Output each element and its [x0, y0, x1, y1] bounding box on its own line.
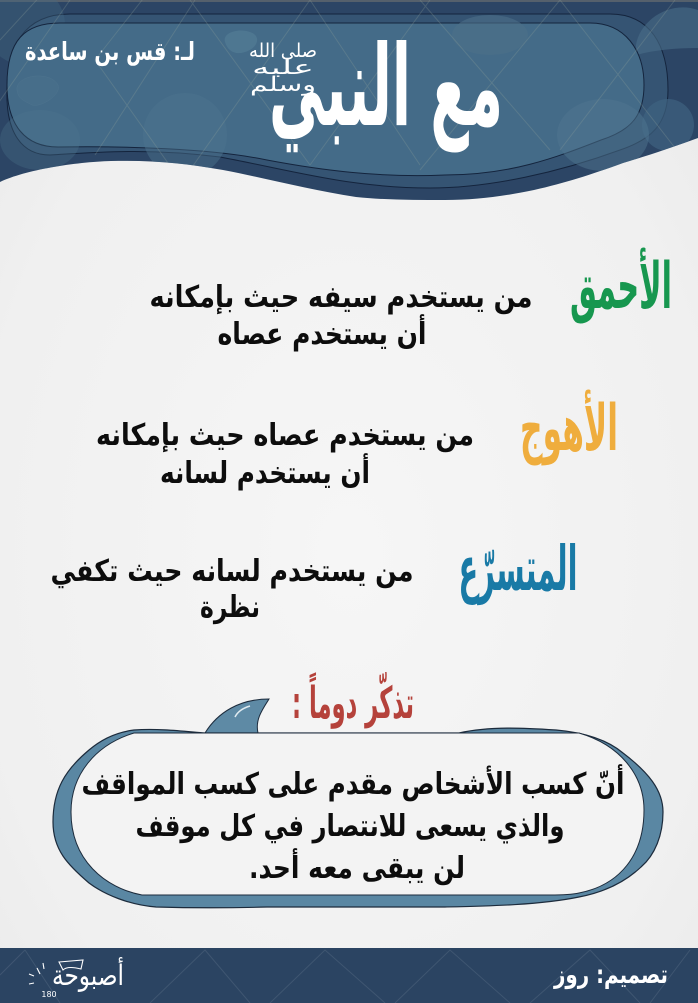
designer credit: تصميم: روز — [552, 960, 668, 990]
definition text: من يستخدم لسانه حيث تكفي — [50, 554, 414, 589]
callout text: والذي يسعى للانتصار في كل موقف — [136, 809, 564, 844]
definition text — [50, 554, 414, 625]
logo: 180 — [41, 990, 57, 999]
callout border — [53, 728, 663, 908]
callout fin — [205, 699, 269, 733]
definition text — [96, 418, 474, 491]
callout text: لن يبقى معه أحد. — [249, 848, 465, 886]
salawat calligraphy — [249, 40, 317, 96]
definition text: من يستخدم عصاه حيث بإمكانه — [96, 418, 474, 453]
footer bar — [0, 948, 698, 1003]
callout text — [82, 764, 624, 886]
callout bubble — [53, 699, 663, 908]
item 2: the reckless — [96, 389, 618, 491]
salawat calligraphy: وسلم — [250, 74, 316, 96]
definition text: من يستخدم سيفه حيث بإمكانه — [150, 280, 532, 315]
item 3: the hasty — [50, 532, 578, 625]
callout inner panel — [71, 733, 644, 895]
item 1: the fool — [150, 247, 672, 352]
salawat calligraphy: صلى الله — [249, 40, 317, 62]
logo — [29, 956, 124, 999]
salawat calligraphy: عليه — [252, 57, 314, 79]
definition text: أن يستخدم عصاه — [218, 314, 426, 352]
definition text: أن يستخدم لسانه — [160, 453, 370, 491]
definition text: نظرة — [200, 590, 260, 625]
reminder heading: تذكّر دوماً : — [292, 671, 414, 729]
logo: أصبوحة — [52, 956, 124, 992]
definition text — [150, 280, 532, 352]
author credit: لـ: قس بن ساعدة — [25, 37, 195, 67]
header banner — [0, 0, 698, 200]
